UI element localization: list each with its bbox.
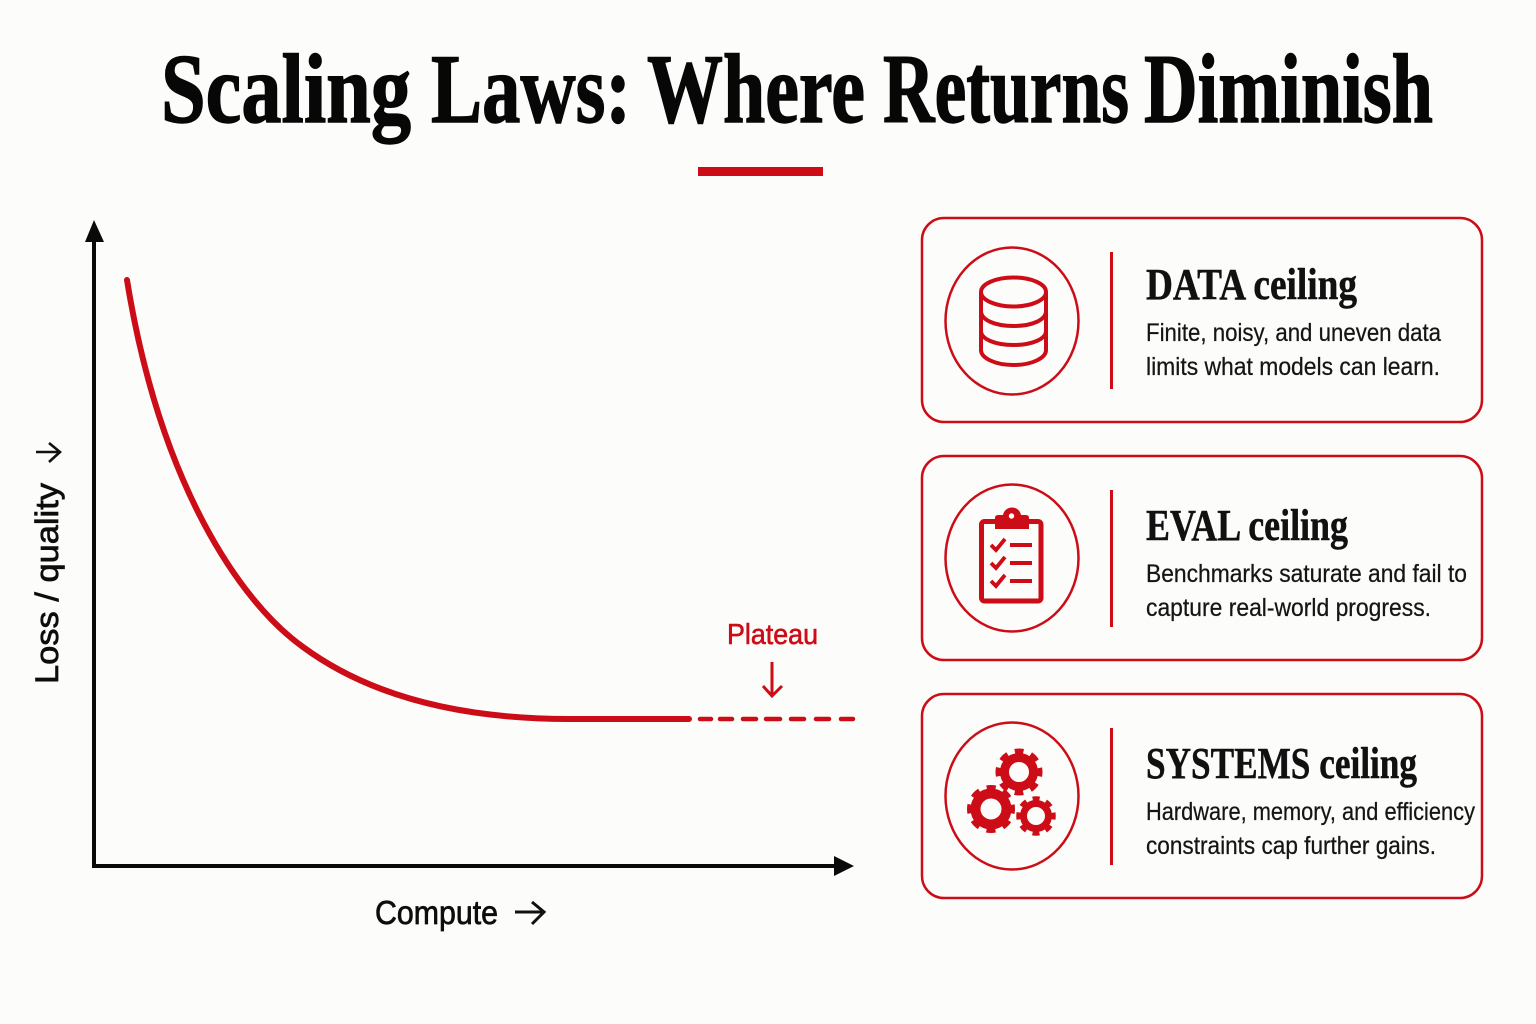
y axis label: Loss / quality	[29, 483, 65, 684]
panel: DATA ceiling	[922, 218, 1482, 422]
title: Laws:	[431, 35, 631, 144]
heading: EVAL ceiling	[1146, 501, 1348, 550]
icon: gears	[970, 752, 1054, 834]
title: Scaling	[161, 35, 411, 144]
heading: SYSTEMS ceiling	[1146, 739, 1417, 788]
title underline	[698, 167, 823, 176]
panel: EVAL ceiling	[922, 456, 1482, 660]
loss curve	[127, 280, 689, 719]
description: capture real-world progress.	[1146, 594, 1431, 622]
description	[1146, 798, 1475, 860]
icon: database	[981, 278, 1046, 365]
description	[1146, 319, 1441, 381]
panel: SYSTEMS ceiling	[922, 694, 1482, 898]
y axis	[85, 220, 104, 868]
description: Hardware, memory, and efficiency	[1146, 798, 1475, 826]
chart	[29, 220, 854, 931]
plateau dashed line	[700, 717, 853, 721]
title: Diminish	[1144, 35, 1433, 144]
description: limits what models can learn.	[1146, 353, 1440, 381]
x axis	[92, 856, 854, 876]
title: Where	[647, 35, 865, 144]
title: Returns	[883, 35, 1129, 144]
plateau label: Plateau	[727, 619, 818, 651]
x axis label: Compute	[375, 894, 498, 931]
title	[161, 35, 1433, 144]
description: Benchmarks saturate and fail to	[1146, 560, 1467, 588]
heading: DATA ceiling	[1146, 260, 1357, 309]
plateau arrow	[763, 662, 782, 696]
description: constraints cap further gains.	[1146, 832, 1436, 860]
description	[1146, 560, 1467, 622]
icon: clipboard checklist	[982, 508, 1041, 601]
description: Finite, noisy, and uneven data	[1146, 319, 1441, 347]
